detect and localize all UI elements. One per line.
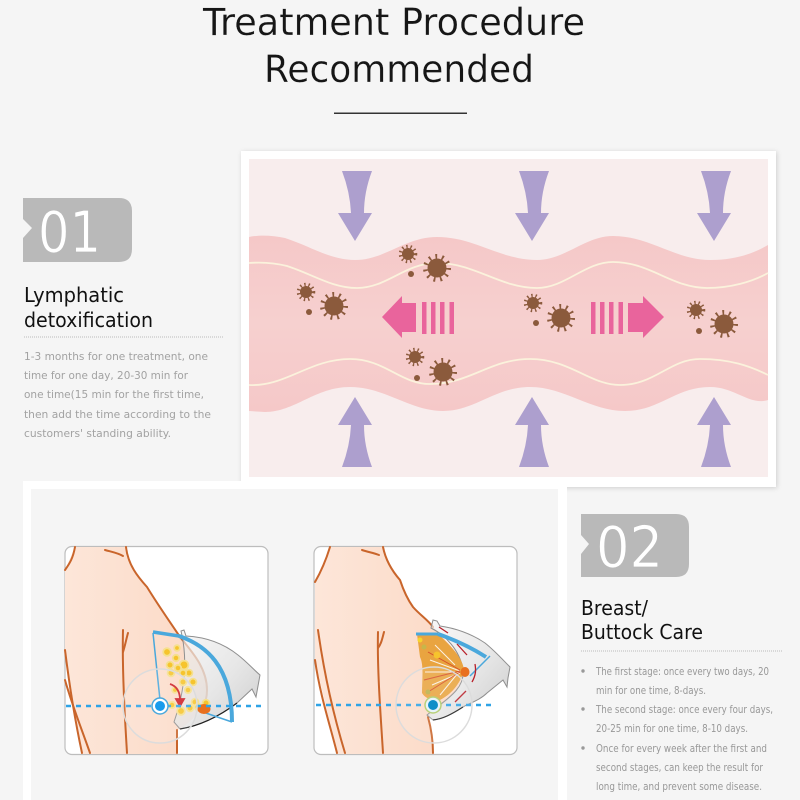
heading: lymphatic detoxification: detoxification [24, 308, 153, 332]
lower cream membrane line [249, 359, 768, 385]
germ cluster top [402, 248, 447, 278]
text block: lymphatic instructions: one time(15 min for the first time, [24, 388, 204, 401]
diagram: before treatment [65, 546, 268, 754]
germ cluster bottom [408, 350, 453, 382]
panel: lymphatic diagram [241, 151, 776, 487]
treatment head circle [123, 669, 197, 743]
heading: lymphatic detoxification: Lymphatic [24, 283, 124, 307]
arrow: pink flow right [591, 296, 664, 338]
text block: lymphatic instructions: time for one day, 20-30 min for [24, 369, 188, 382]
badge 02: 02 [596, 515, 663, 581]
treatment head circle [396, 667, 472, 743]
text block: breast care stages [581, 665, 773, 793]
germ cluster center right [526, 296, 571, 328]
text block: breast care stages: min for one time, 8-days. [596, 684, 706, 697]
text block: lymphatic instructions [24, 350, 211, 440]
arrows: pressure from below [338, 397, 731, 467]
blue treatment zone outline [416, 634, 490, 676]
suction cup [427, 620, 510, 720]
arrows: pressure from above [338, 171, 731, 241]
germ cluster far right [690, 304, 734, 334]
badge 01: 01 [38, 200, 101, 266]
red arrows [439, 627, 476, 702]
body contour lines [65, 547, 207, 753]
diagram: after treatment [314, 546, 517, 754]
orange nipple area [460, 667, 470, 677]
red arrow [170, 684, 184, 706]
text block: lymphatic instructions: 1-3 months for one treatment, one [24, 350, 208, 363]
badge 01 [23, 198, 132, 266]
heading: lymphatic detoxification [24, 283, 153, 332]
heading: breast / buttock care: Breast/ [581, 596, 648, 620]
body contour lines [315, 547, 433, 753]
fat cells [163, 645, 209, 715]
badge 02 [581, 514, 689, 581]
body silhouette [65, 547, 207, 754]
title: Recommended [264, 47, 534, 91]
text block: breast care stages: long time, and prevent some disease. [596, 780, 762, 793]
title: Treatment Procedure [202, 0, 585, 44]
orange nipple area [198, 704, 210, 714]
blue treatment zone outline [153, 632, 232, 722]
arrow: pink flow left [382, 296, 454, 338]
upper cream membrane line [249, 262, 768, 288]
panel: breast care diagrams [23, 481, 567, 800]
tissue veins [425, 645, 460, 695]
text block: breast care stages: 20-25 min for one time, 8-10 days. [596, 722, 748, 735]
breast tissue [417, 634, 464, 700]
dashed axis [316, 704, 492, 706]
heading: breast / buttock care: Buttock Care [581, 620, 703, 644]
title [202, 0, 585, 91]
dashed axis [66, 705, 264, 707]
germ cluster left [300, 286, 344, 316]
text block: lymphatic instructions: customers' standing ability. [24, 427, 171, 440]
lymph vessel band [249, 236, 768, 412]
suction cup [174, 630, 260, 729]
text block: lymphatic instructions: then add the time according to the [24, 408, 211, 421]
heading: breast / buttock care [581, 596, 703, 644]
body silhouette [315, 547, 463, 754]
